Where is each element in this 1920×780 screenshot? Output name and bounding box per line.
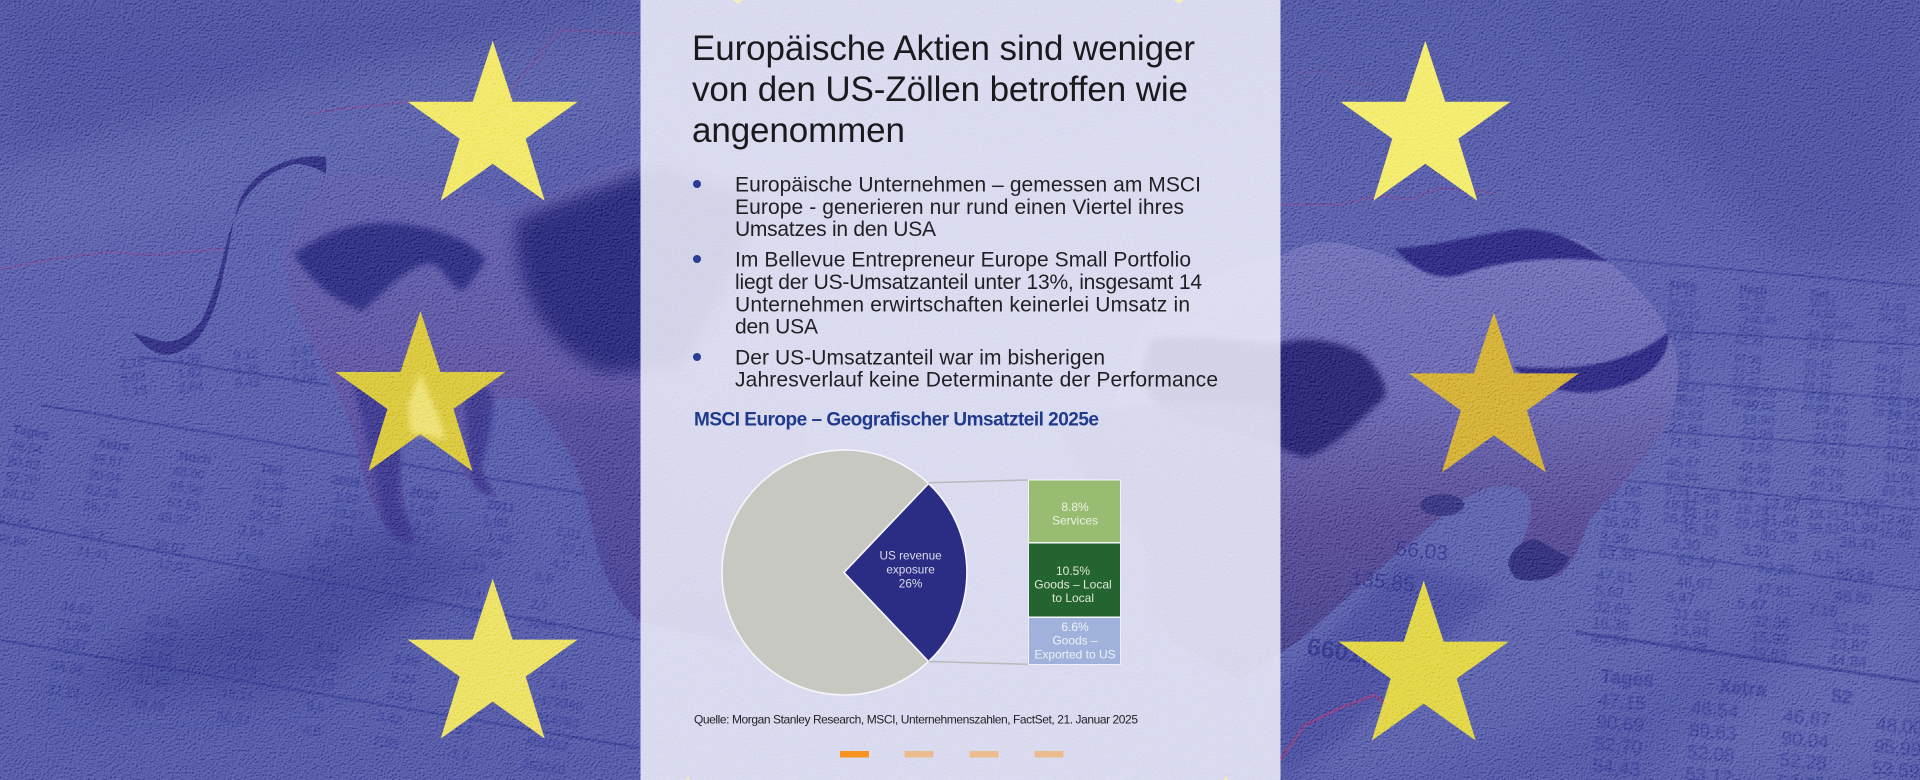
bull hoof	[1508, 540, 1570, 581]
background: right stock table: 39,95 40,10 40,41 29,74	[1660, 392, 1900, 420]
left bull	[133, 154, 810, 650]
bull dark back patch	[294, 223, 486, 311]
background: pink chart lines right	[1280, 188, 1496, 205]
bullet 2: den USA	[735, 315, 818, 338]
pie label: US revenue	[879, 548, 942, 562]
background: right stock table: 29,88 30,05 30,90 22,01	[1665, 319, 1905, 348]
background: right stock table: 3,36 3,30 3,31 5,51	[1599, 529, 1843, 567]
pie: US revenue exposure	[844, 484, 967, 662]
background: right stock table: 31,75 31,14 31,46 31,99	[1602, 497, 1879, 538]
background: left stock table: 22,19 16,48 50,37 4,9 7,55 1,2 353260	[46, 681, 566, 778]
panel: central white content panel	[640, 0, 1280, 780]
background: right stock table	[1280, 70, 1920, 780]
background: right stock table: 32,65 31,92 32,36 32,65	[1593, 599, 1870, 640]
bull body	[1100, 236, 1678, 680]
background: pink chart line left	[0, 249, 224, 269]
second bull behind the panel	[1060, 402, 1280, 640]
background: right stock table: 5,62 5,47 5,47 7,16	[1594, 583, 1838, 621]
background: right stock table: 18,52 18,79 19,71 12,83	[1664, 496, 1913, 528]
background: right stock table: 63,39 62,10 62,25 65,64	[1598, 545, 1875, 586]
bull dark shoulder patch	[516, 165, 760, 373]
bull dark chest	[1513, 332, 1669, 393]
background: right stock table: 45,47 45,58 46,79 31,02	[1666, 454, 1916, 486]
background: right stock table: 40,54 39,78 39,83 44,84	[1590, 630, 1867, 672]
background: right stock table: Tages Xetra 52	[1600, 666, 1853, 709]
connector lines	[929, 480, 1028, 664]
bullet 2: Im Bellevue Entrepreneur Europe Small Portfolio	[735, 249, 1191, 272]
bar: services: Services	[1052, 514, 1098, 528]
bar: goods exported to US: Exported to US	[1034, 648, 1116, 662]
background: right stock table: 12,00 12,66 12,87 13,43	[1603, 481, 1880, 522]
bar: goods local to local: Goods – Local	[1034, 578, 1112, 592]
background: right stock table: 71,75 72,55 74,00 40,20	[1668, 434, 1917, 466]
background: left stock table: 45,84 31,41 12,03 3,52 7,71 11,9 1,8 3248	[0, 530, 557, 633]
background: right stock table: 90,69 89,63 90,04 95,99	[1596, 712, 1920, 761]
background: left stock table: 57,15 30,2 38,07 7,99 4,83 4,12 19,4 2,7	[0, 512, 550, 614]
background: right stock table: 36,63 36,35 36,78 38,41	[1600, 513, 1877, 554]
background: right stock table: 17,13 17,13 25,76 15,69	[1663, 359, 1902, 388]
numbers beside bull: 135,85	[1349, 567, 1416, 597]
bar: services	[1029, 480, 1120, 542]
bar: goods local to local: to Local	[1052, 591, 1094, 605]
bullet 1: Europe - generieren nur rund einen Viertel ihres	[735, 196, 1184, 219]
background: left stock table: 52,70 52,28 53,59 35,76 3,01 1,77 0,98 4,2	[4, 469, 571, 573]
background: right stock table: 60,33 62,42 65,20 51,35	[1662, 370, 1901, 398]
title: Europäische Aktien sind weniger	[692, 29, 1195, 68]
bull tail	[133, 156, 326, 355]
background: right stock table: 17,10 17,55 18,51 11,40	[1668, 286, 1907, 315]
bullet 2: Unternehmen erwirtschaften keinerlei Umsatz in	[735, 293, 1190, 316]
background: right stock table: 25,02 25,02 27,80 20,50	[1671, 392, 1920, 424]
bullet list	[693, 174, 1218, 392]
pie label: 26%	[899, 576, 923, 590]
background: left stock table: 7,19 2,64 8,42 5,09	[121, 370, 318, 399]
bullet 1: Europäische Unternehmen – gemessen am MSCI	[735, 174, 1201, 197]
pie label	[879, 548, 942, 590]
bull body	[286, 154, 810, 650]
background: right stock table: 18,53 18,90 19,68 11,43	[1670, 406, 1918, 438]
bull legs dark folds	[352, 380, 414, 542]
background: left stock table: 64,08 27,94 13,15 8,6 3,42 9,7 465012	[50, 657, 570, 754]
bar: goods local to local	[1029, 544, 1120, 616]
background: left stock table: 2,18 4,56 9,12 3,47	[119, 342, 316, 371]
bullet 1	[693, 174, 1201, 241]
bullet 3: Der US-Umsatzanteil war im bisherigen	[735, 346, 1105, 369]
chart heading: MSCI Europe – Geografischer Umsatzteil 2025e	[694, 410, 1099, 431]
numbers beside bull	[1305, 537, 1449, 674]
background: left stock table: 19,87 42,56 11,73 5,18 6,03 0,1 614792	[54, 634, 580, 731]
background: right stock table: 6,31 6,31 7,39 5,22	[1665, 482, 1885, 512]
star 2	[335, 311, 505, 471]
star 3	[408, 579, 578, 739]
background: left stock table: 71,09 25,65 37,12 3,35 8,24 2,9 479340	[57, 616, 584, 714]
EU stars left and right	[335, 41, 1579, 741]
right bull	[1060, 229, 1678, 780]
background: right stock table: 95,59 96,46 97,19 66,74	[1666, 468, 1915, 500]
bull belly shadow	[530, 400, 680, 622]
background: right stock table: 51,64 52,33 56,60 40,75	[1665, 330, 1904, 359]
title: angenommen	[692, 111, 905, 150]
background: left stock table: 90,69 90,04 95,99 75,16 10,37 3,17 1,45 27,1	[7, 453, 588, 559]
background: left stock table: 34,62 18,30 12,95 6,41 9,88 14,4 1,6	[60, 598, 569, 693]
star 1	[408, 41, 578, 201]
pie: rest of revenue	[722, 450, 929, 695]
bullet 1: Umsatzes in den USA	[735, 218, 936, 241]
background: right stock table: 47,61 46,67 47,61 48,80	[1596, 567, 1873, 608]
bar: goods exported to US: Goods –	[1052, 634, 1098, 648]
numbers beside bull: 6601,57	[1305, 633, 1399, 674]
background: right stock table: 47,15 46,54 46,87 48,00	[1597, 690, 1920, 739]
background: right stock table: 106,10 106,85 110,00 67,21	[1666, 308, 1920, 338]
source note: Quelle: Morgan Stanley Research, MSCI, Unternehmenszahlen, FactSet, 21. Januar 2025	[694, 712, 1138, 726]
background: right stock table: 27,23 27,56 27,71 21,66	[1672, 378, 1920, 410]
background: right stock table: 35,84 35,90 39,38 22,02	[1661, 381, 1901, 409]
bullet 3: Jahresverlauf keine Determinante der Performance	[735, 369, 1218, 392]
star 4	[1340, 41, 1510, 201]
numbers beside bull: 56,03	[1394, 537, 1449, 565]
background: right stock table: 22,80 23,95 24,70 13,70	[1669, 420, 1918, 452]
chart line near bull foot	[1280, 695, 1390, 760]
bullet 2: liegt der US-Umsatzanteil unter 13%, insgesamt 14	[735, 271, 1202, 294]
bull dark flank	[1140, 337, 1386, 458]
bar: goods exported to US	[1029, 618, 1120, 664]
bullet 3	[693, 346, 1218, 392]
title: von den US-Zöllen betroffen wie	[692, 70, 1188, 109]
background: left stock table: Tages Xetra Hoch Tief 2009 2010 2011	[12, 421, 516, 515]
stacked bar breakdown	[1028, 480, 1121, 665]
star 6	[1339, 581, 1509, 741]
title	[692, 29, 1195, 150]
background: right stock table: 28,17 28,43 30,33 15,40	[1663, 510, 1912, 542]
bull dark back streak	[1394, 229, 1610, 277]
star tips showing through panel	[686, 0, 1228, 780]
background: left stock table: 53,12 56,7 45,27 3,64 5,87 2,38 1,43 9,6	[2, 484, 554, 586]
pagination markers	[840, 751, 1064, 758]
pie chart	[722, 450, 967, 695]
bullet 2	[693, 249, 1202, 338]
background: right stock table: 65,52 67,35 68,19 48,12	[1663, 348, 1903, 377]
star 2 leg highlight	[408, 372, 446, 440]
background: right stock table: 16,36 15,84 15,90 23,87	[1591, 615, 1869, 656]
bar: services: 8.8%	[1061, 500, 1089, 514]
background: right stock table: Xetra Hoch Tief	[1668, 278, 1830, 301]
bull shadow on table	[1280, 560, 1500, 780]
bar: goods local to local: 10.5%	[1056, 564, 1090, 578]
background: left stock table	[0, 30, 640, 779]
bar: goods exported to US: 6.6%	[1061, 620, 1089, 634]
star 5	[1409, 312, 1579, 472]
background: right stock table: 36,22 36,95 41,65 26,05	[1667, 297, 1907, 326]
pie label: exposure	[886, 562, 935, 576]
background: left stock table: 5,03 1,82 6,35 7,21	[120, 356, 317, 385]
background: left stock table: 46,54 46,87 48,00 31,35 1,22 1,69 1,88 2,01	[9, 437, 583, 542]
